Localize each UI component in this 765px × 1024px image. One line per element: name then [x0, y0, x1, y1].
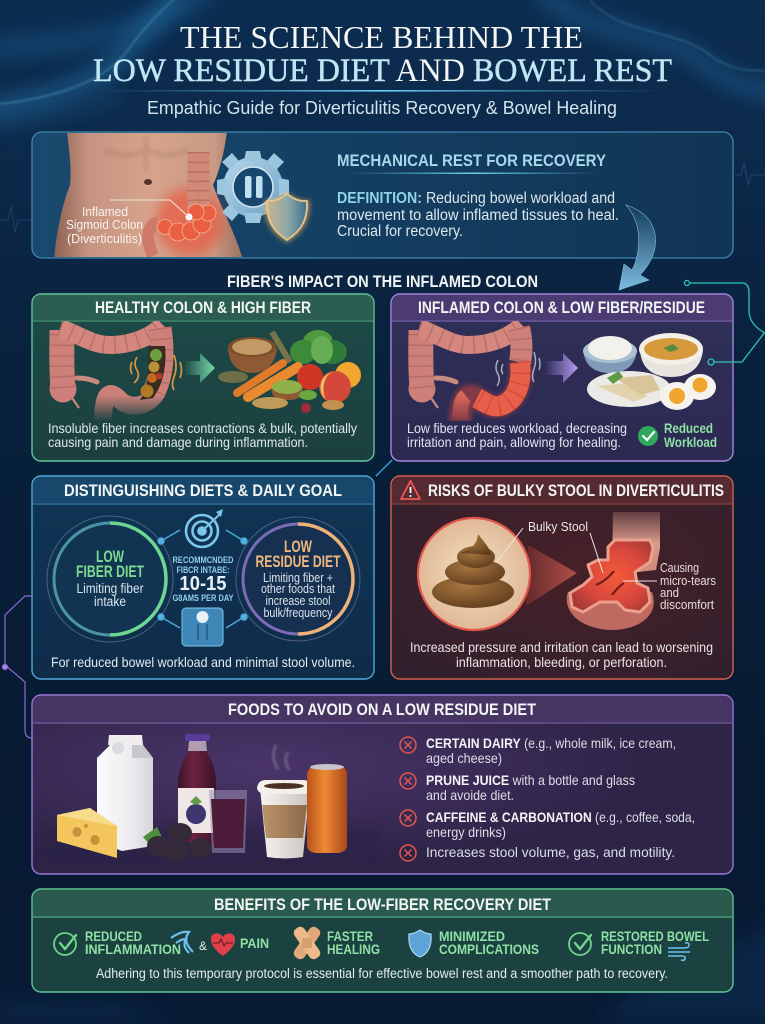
- goal text: G8AMS PER DAY: [172, 593, 234, 604]
- heading: HEALTHY COLON & HIGH FIBER: [95, 298, 311, 317]
- illustration: juice glass: [209, 790, 247, 853]
- arrow: curved blue arrow: [619, 205, 656, 290]
- list text: Increases stool volume, gas, and motility.: [426, 844, 675, 860]
- list: foods to avoid: [400, 735, 695, 861]
- illustration: inflamed colon: [408, 325, 540, 422]
- text: reduced bowel workload: For reduced bowel workload and minimal stool volume.: [51, 654, 355, 670]
- text: insoluble fiber: [48, 420, 357, 450]
- icon: wind: [668, 943, 690, 960]
- text: micro tears: and: [660, 585, 679, 600]
- panel: distinguishing diets: [32, 476, 374, 679]
- label: inflamed sigmoid colon: (Diverticulitis): [67, 232, 142, 246]
- text: increased pressure: inflammation, bleeding, or perforation.: [456, 654, 667, 670]
- icon: shield blue: [409, 930, 431, 957]
- label: reduced inflammation: [85, 928, 181, 957]
- illustration: coffee cup: [257, 745, 312, 858]
- label: minimized complications: MINIMIZED: [439, 928, 505, 944]
- circuit line: left purple: [2, 596, 32, 738]
- label: bulky stool: [497, 528, 657, 581]
- list text: CERTAIN DAIRY (e.g., whole milk, ice cream,: [426, 735, 676, 751]
- subtitle: Empathic Guide for Diverticulitis Recovery & Bowel Healing: [147, 98, 617, 118]
- definition text: movement to allow inflamed tissues to heal.: [337, 207, 619, 224]
- panel: foods to avoid: [32, 695, 733, 874]
- circuit line: connector: [376, 460, 392, 476]
- illustration: cheese: [57, 808, 117, 858]
- illustration: high fiber foods: [218, 330, 361, 413]
- goal text: [172, 555, 234, 604]
- low residue circle: Limiting fiber +: [263, 570, 333, 585]
- label: minimized complications: [439, 928, 539, 957]
- label: minimized complications: COMPLICATIONS: [439, 941, 539, 957]
- low residue circle: other foods that: [261, 581, 335, 596]
- low fiber circle: [47, 516, 173, 642]
- panel: healthy colon and high fiber: [32, 294, 374, 461]
- illustration: prunes: [143, 823, 211, 862]
- title: THE SCIENCE BEHIND THE: [180, 19, 583, 55]
- label: faster healing: FASTER: [327, 928, 373, 944]
- goal text: 10-15: [180, 573, 226, 595]
- panel: inflamed colon and low fiber: [391, 294, 733, 461]
- panel header: [33, 890, 732, 917]
- icon: bandage: [292, 925, 322, 961]
- label: inflamed sigmoid colon: Sigmoid Colon: [66, 218, 143, 232]
- list text: energy drinks): [426, 824, 506, 840]
- label: restored bowel function: RESTORED BOWEL: [601, 928, 709, 944]
- circuit line: right teal: [684, 280, 765, 365]
- label: inflamed sigmoid colon: Inflamed: [82, 205, 128, 219]
- heading: INFLAMED COLON & LOW FIBER/RESIDUE: [418, 298, 705, 317]
- icon: waves: [171, 932, 193, 953]
- footer text: Adhering to this temporary protocol is essential for effective bowel rest and a smoother path to recovery.: [96, 966, 668, 981]
- icon: shield: [264, 192, 310, 243]
- goal text: RECOMMCNDED: [172, 555, 234, 566]
- text: insoluble fiber: causing pain and damage during inflammation.: [48, 434, 308, 450]
- text: increased pressure: Increased pressure and irritation can lead to worsening: [410, 639, 713, 655]
- text: low fiber: irritation and pain, allowing for healing.: [407, 434, 621, 450]
- label: reduced inflammation: REDUCED: [85, 928, 142, 944]
- label: pain: PAIN: [240, 935, 269, 951]
- definition text: DEFINITION: Reducing bowel workload and: [337, 190, 615, 207]
- cone: [526, 545, 577, 606]
- text: micro tears: micro-tears: [660, 573, 716, 588]
- illustration: inflamed colon section: [567, 512, 660, 630]
- list text: CAFFEINE & CARBONATION (e.g., coffee, soda,: [426, 809, 695, 825]
- text: low fiber: [407, 420, 627, 450]
- goal text: FIBCR INTABE:: [176, 565, 230, 576]
- text: micro tears: discomfort: [660, 597, 714, 612]
- arrow: purple: [546, 353, 578, 383]
- label: reduced workload: Reduced: [664, 420, 713, 436]
- label: reduced workload: [664, 420, 717, 450]
- icon: x marks: [400, 737, 416, 861]
- panel header: [392, 295, 732, 321]
- illustration: low residue foods: [583, 333, 716, 410]
- icon: check one: [54, 933, 76, 955]
- heading: BENEFITS OF THE LOW-FIBER RECOVERY DIET: [214, 895, 552, 914]
- low residue circle: increase stool: [266, 593, 331, 608]
- low fiber circle: FIBER DIET: [76, 562, 144, 581]
- icon: check: [638, 426, 658, 446]
- label: reduced workload: Workload: [664, 434, 717, 450]
- illustration: energy drink can: [307, 764, 347, 853]
- icon: check two: [569, 933, 591, 955]
- icon: warning: [401, 481, 420, 499]
- text: micro tears: [660, 560, 716, 612]
- list text: aged cheese): [426, 750, 502, 766]
- title: [93, 19, 672, 89]
- illustration: abdomen with inflamed sigmoid colon: [54, 130, 243, 260]
- heading: mechanical rest: MECHANICAL REST FOR RECOVERY: [337, 151, 607, 170]
- label: restored bowel function: [601, 928, 709, 957]
- illustration: bulky stool: [418, 518, 530, 630]
- text: low fiber: Low fiber reduces workload, decreasing: [407, 420, 627, 436]
- connector nodes: [158, 530, 247, 628]
- text: increased pressure: [410, 639, 713, 670]
- panel header: [33, 295, 373, 321]
- panel header: [33, 477, 373, 504]
- text: insoluble fiber: Insoluble fiber increases contractions & bulk, potentially: [48, 420, 357, 436]
- list text: PRUNE JUICE with a bottle and glass: [426, 772, 635, 788]
- label: restored bowel function: FUNCTION: [601, 941, 662, 957]
- label: inflamed sigmoid colon: [66, 205, 143, 246]
- heading: DISTINGUISHING DIETS & DAILY GOAL: [64, 481, 342, 500]
- heading: fiber's impact: FIBER'S IMPACT ON THE INFLAMED COLON: [227, 273, 538, 291]
- low residue circle: [236, 517, 360, 641]
- low residue circle: LOW: [284, 537, 313, 556]
- list text: and avoide diet.: [426, 787, 514, 803]
- illustration: healthy colon: [50, 325, 182, 422]
- title: LOW RESIDUE DIET AND BOWEL REST: [93, 53, 672, 89]
- list text: [426, 735, 695, 860]
- definition text: [337, 190, 619, 240]
- panel: mechanical rest: [32, 130, 733, 260]
- label: faster healing: HEALING: [327, 941, 380, 957]
- text: micro tears: Causing: [660, 560, 699, 575]
- icon: target: [186, 509, 223, 547]
- ampersand: &: [199, 939, 207, 953]
- low residue circle: RESIDUE DIET: [256, 552, 341, 571]
- icon: scale: [182, 608, 223, 646]
- low fiber circle: LOW: [96, 547, 125, 566]
- heading: FOODS TO AVOID ON A LOW RESIDUE DIET: [228, 700, 537, 719]
- text: bulky stool label: Bulky Stool: [528, 519, 588, 534]
- panel: risks of bulky stool: [391, 476, 733, 679]
- definition text: Crucial for recovery.: [337, 223, 463, 240]
- panel: benefits: [32, 889, 733, 992]
- panel header: [33, 696, 732, 723]
- low residue circle: bulk/frequency: [264, 605, 333, 620]
- panel header: [392, 477, 732, 504]
- icon: pause gear: [217, 151, 289, 223]
- arrow: green: [185, 353, 215, 383]
- low fiber circle: Limiting fiber: [76, 581, 144, 596]
- label: faster healing: [327, 928, 380, 957]
- icon: heart: [211, 933, 235, 956]
- label: reduced inflammation: INFLAMMATION: [85, 941, 181, 957]
- illustration: milk carton: [97, 735, 153, 851]
- low fiber circle: intake: [94, 594, 126, 609]
- illustration: prune juice bottle: [178, 734, 216, 842]
